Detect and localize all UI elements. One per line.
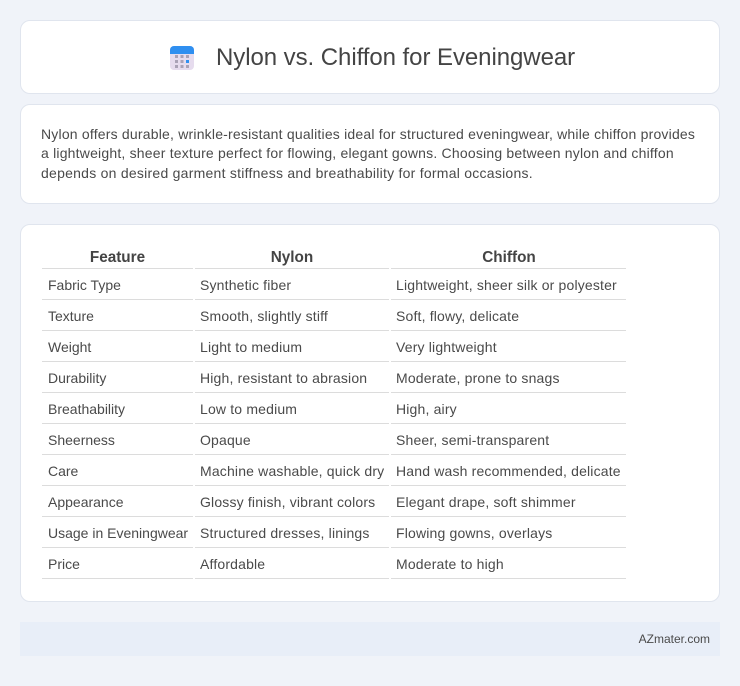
comparison table: Hand wash recommended, delicate bbox=[396, 463, 621, 479]
summary text: depends on desired garment stiffness and breathability for formal occasions. bbox=[41, 165, 533, 181]
panel: comparison table bbox=[20, 224, 720, 602]
comparison table: High, airy bbox=[396, 401, 457, 417]
comparison table: Machine washable, quick dry bbox=[200, 463, 384, 479]
comparison table: Light to medium bbox=[200, 339, 302, 355]
panel: title card bbox=[20, 20, 720, 94]
comparison table: Sheerness bbox=[48, 432, 115, 448]
panel: summary bbox=[20, 104, 720, 204]
comparison table bbox=[42, 249, 626, 579]
comparison table: Price bbox=[48, 556, 80, 572]
comparison table: Glossy finish, vibrant colors bbox=[200, 494, 375, 510]
comparison table: Flowing gowns, overlays bbox=[396, 525, 552, 541]
comparison table: Texture bbox=[48, 308, 94, 324]
summary text: a lightweight, sheer texture perfect for flowing, elegant gowns. Choosing between nylon and chiffon bbox=[41, 145, 674, 161]
comparison table: Usage in Eveningwear bbox=[48, 525, 188, 541]
summary text bbox=[41, 126, 695, 181]
comparison table: Moderate, prone to snags bbox=[396, 370, 560, 386]
comparison table: Smooth, slightly stiff bbox=[200, 308, 328, 324]
table header bbox=[90, 249, 536, 266]
comparison table: Affordable bbox=[200, 556, 265, 572]
comparison table: Fabric Type bbox=[48, 277, 121, 293]
summary text: Nylon offers durable, wrinkle-resistant qualities ideal for structured eveningwear, while chiffon provides bbox=[41, 126, 695, 142]
comparison table: Moderate to high bbox=[396, 556, 504, 572]
comparison table: Sheer, semi-transparent bbox=[396, 432, 549, 448]
comparison table: Lightweight, sheer silk or polyester bbox=[396, 277, 617, 293]
title: Nylon vs. Chiffon for Eveningwear bbox=[216, 44, 575, 71]
comparison table: Synthetic fiber bbox=[200, 277, 291, 293]
footer bar bbox=[20, 622, 720, 656]
footer text: AZmater.com bbox=[639, 632, 710, 646]
comparison table: Weight bbox=[48, 339, 91, 355]
comparison table: High, resistant to abrasion bbox=[200, 370, 367, 386]
table header: Nylon bbox=[271, 249, 313, 266]
comparison table: Appearance bbox=[48, 494, 124, 510]
comparison table: Low to medium bbox=[200, 401, 297, 417]
comparison table: Elegant drape, soft shimmer bbox=[396, 494, 576, 510]
comparison table: Structured dresses, linings bbox=[200, 525, 370, 541]
comparison table: Soft, flowy, delicate bbox=[396, 308, 519, 324]
comparison table: Breathability bbox=[48, 401, 125, 417]
comparison table: Very lightweight bbox=[396, 339, 497, 355]
comparison table: Opaque bbox=[200, 432, 251, 448]
icon: calendar bbox=[170, 46, 194, 70]
table header: Feature bbox=[90, 249, 145, 266]
comparison table: Care bbox=[48, 463, 78, 479]
table header: Chiffon bbox=[482, 249, 536, 266]
comparison table: Durability bbox=[48, 370, 106, 386]
